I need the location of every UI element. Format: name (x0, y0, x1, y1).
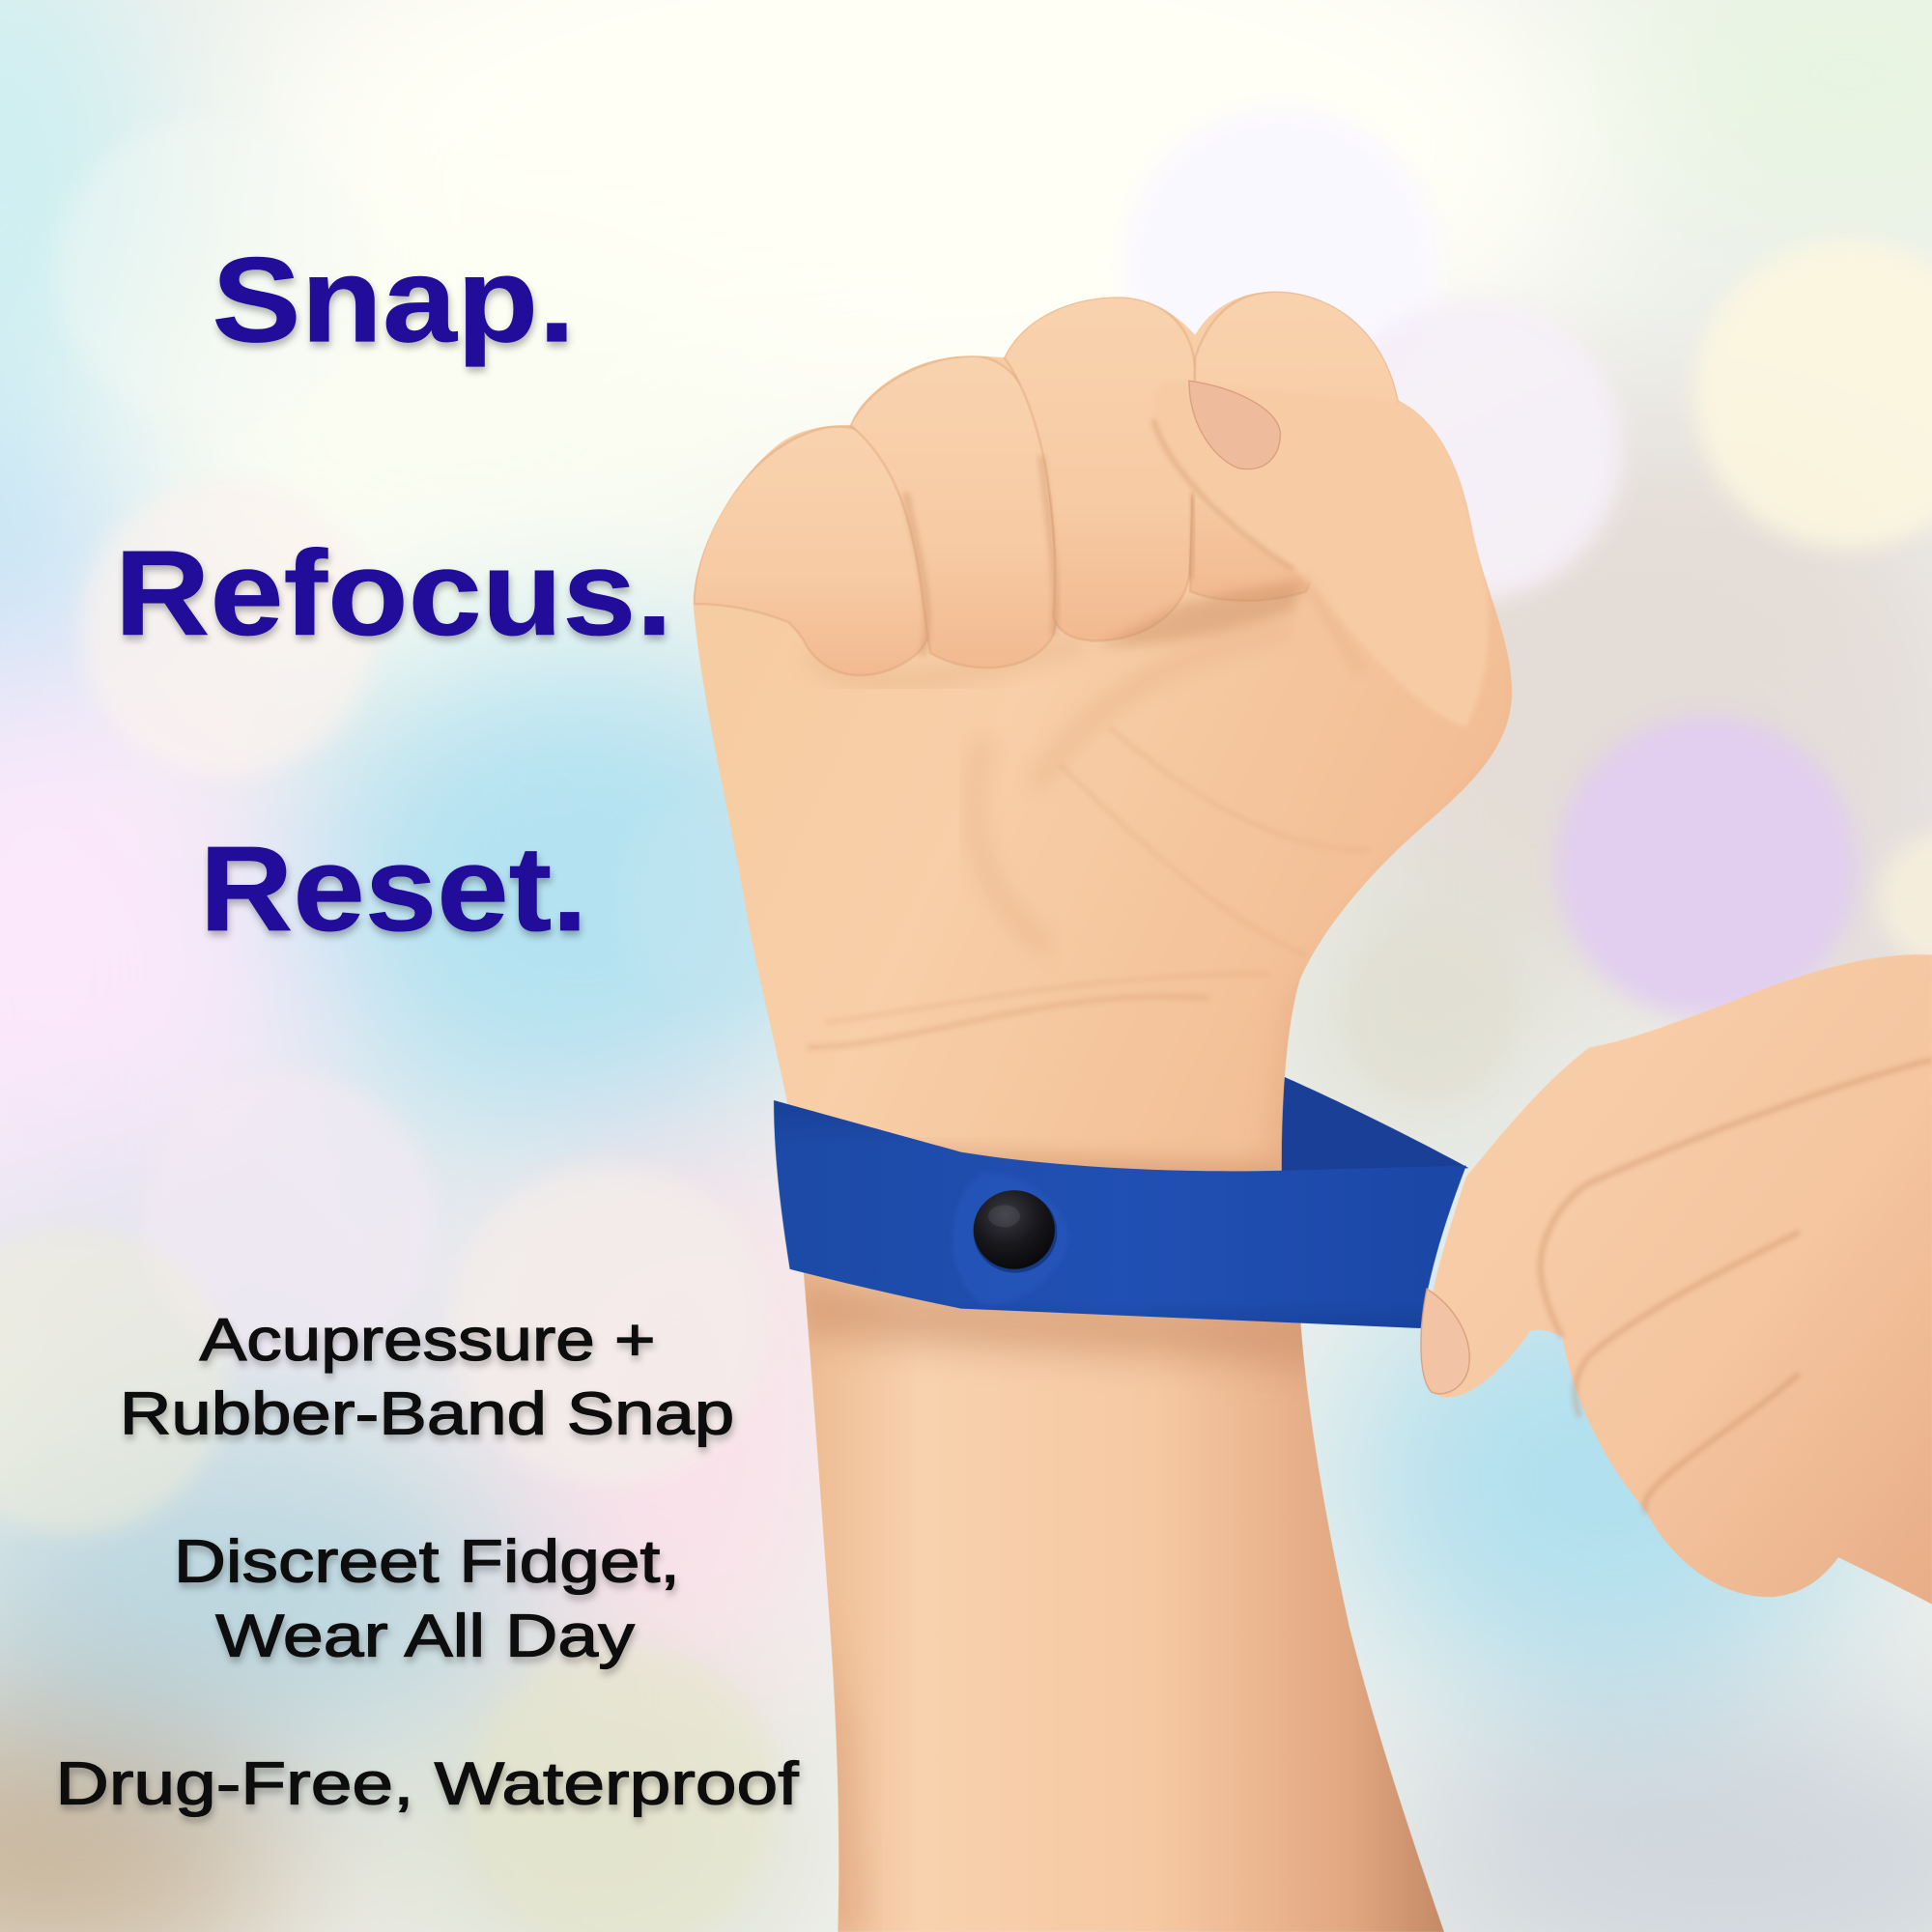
benefit: drug-free: Drug-Free, Waterproof (55, 1749, 799, 1817)
back strap of band (1282, 1076, 1468, 1182)
benefit: acupressure (120, 1306, 734, 1448)
headline (115, 233, 672, 956)
headline word: Reset.: Reset. (200, 822, 587, 956)
headline word: Refocus.: Refocus. (115, 526, 672, 661)
pulling hand (1421, 954, 1932, 1605)
ring finger (850, 356, 1057, 668)
fist and wrist (694, 292, 1528, 1189)
middle finger (1005, 297, 1195, 640)
thumbnail (1189, 381, 1280, 469)
benefit: acupressure: Acupressure + (200, 1306, 656, 1374)
benefit: discreet fidget: Wear All Day (215, 1602, 636, 1669)
finger creases (1540, 1060, 1932, 1513)
palm shading (801, 518, 1528, 1189)
benefits text (55, 1306, 799, 1817)
blue wristband with snap (764, 1096, 1479, 1337)
finger shadow edges (906, 493, 927, 656)
forearm below band (788, 1269, 1444, 1932)
icon: black snap button (974, 1190, 1057, 1273)
snap tab (952, 1173, 1069, 1306)
headline word: Snap.: Snap. (212, 233, 576, 367)
thumb: merges into the back of the hand (1191, 401, 1488, 725)
benefit: acupressure: Rubber-Band Snap (120, 1380, 734, 1448)
thumbnail on pulling hand (1421, 1289, 1469, 1394)
benefit: discreet fidget: Discreet Fidget, (174, 1528, 680, 1596)
little finger (694, 427, 932, 675)
index finger (1190, 292, 1399, 601)
benefit: discreet fidget (174, 1528, 680, 1669)
